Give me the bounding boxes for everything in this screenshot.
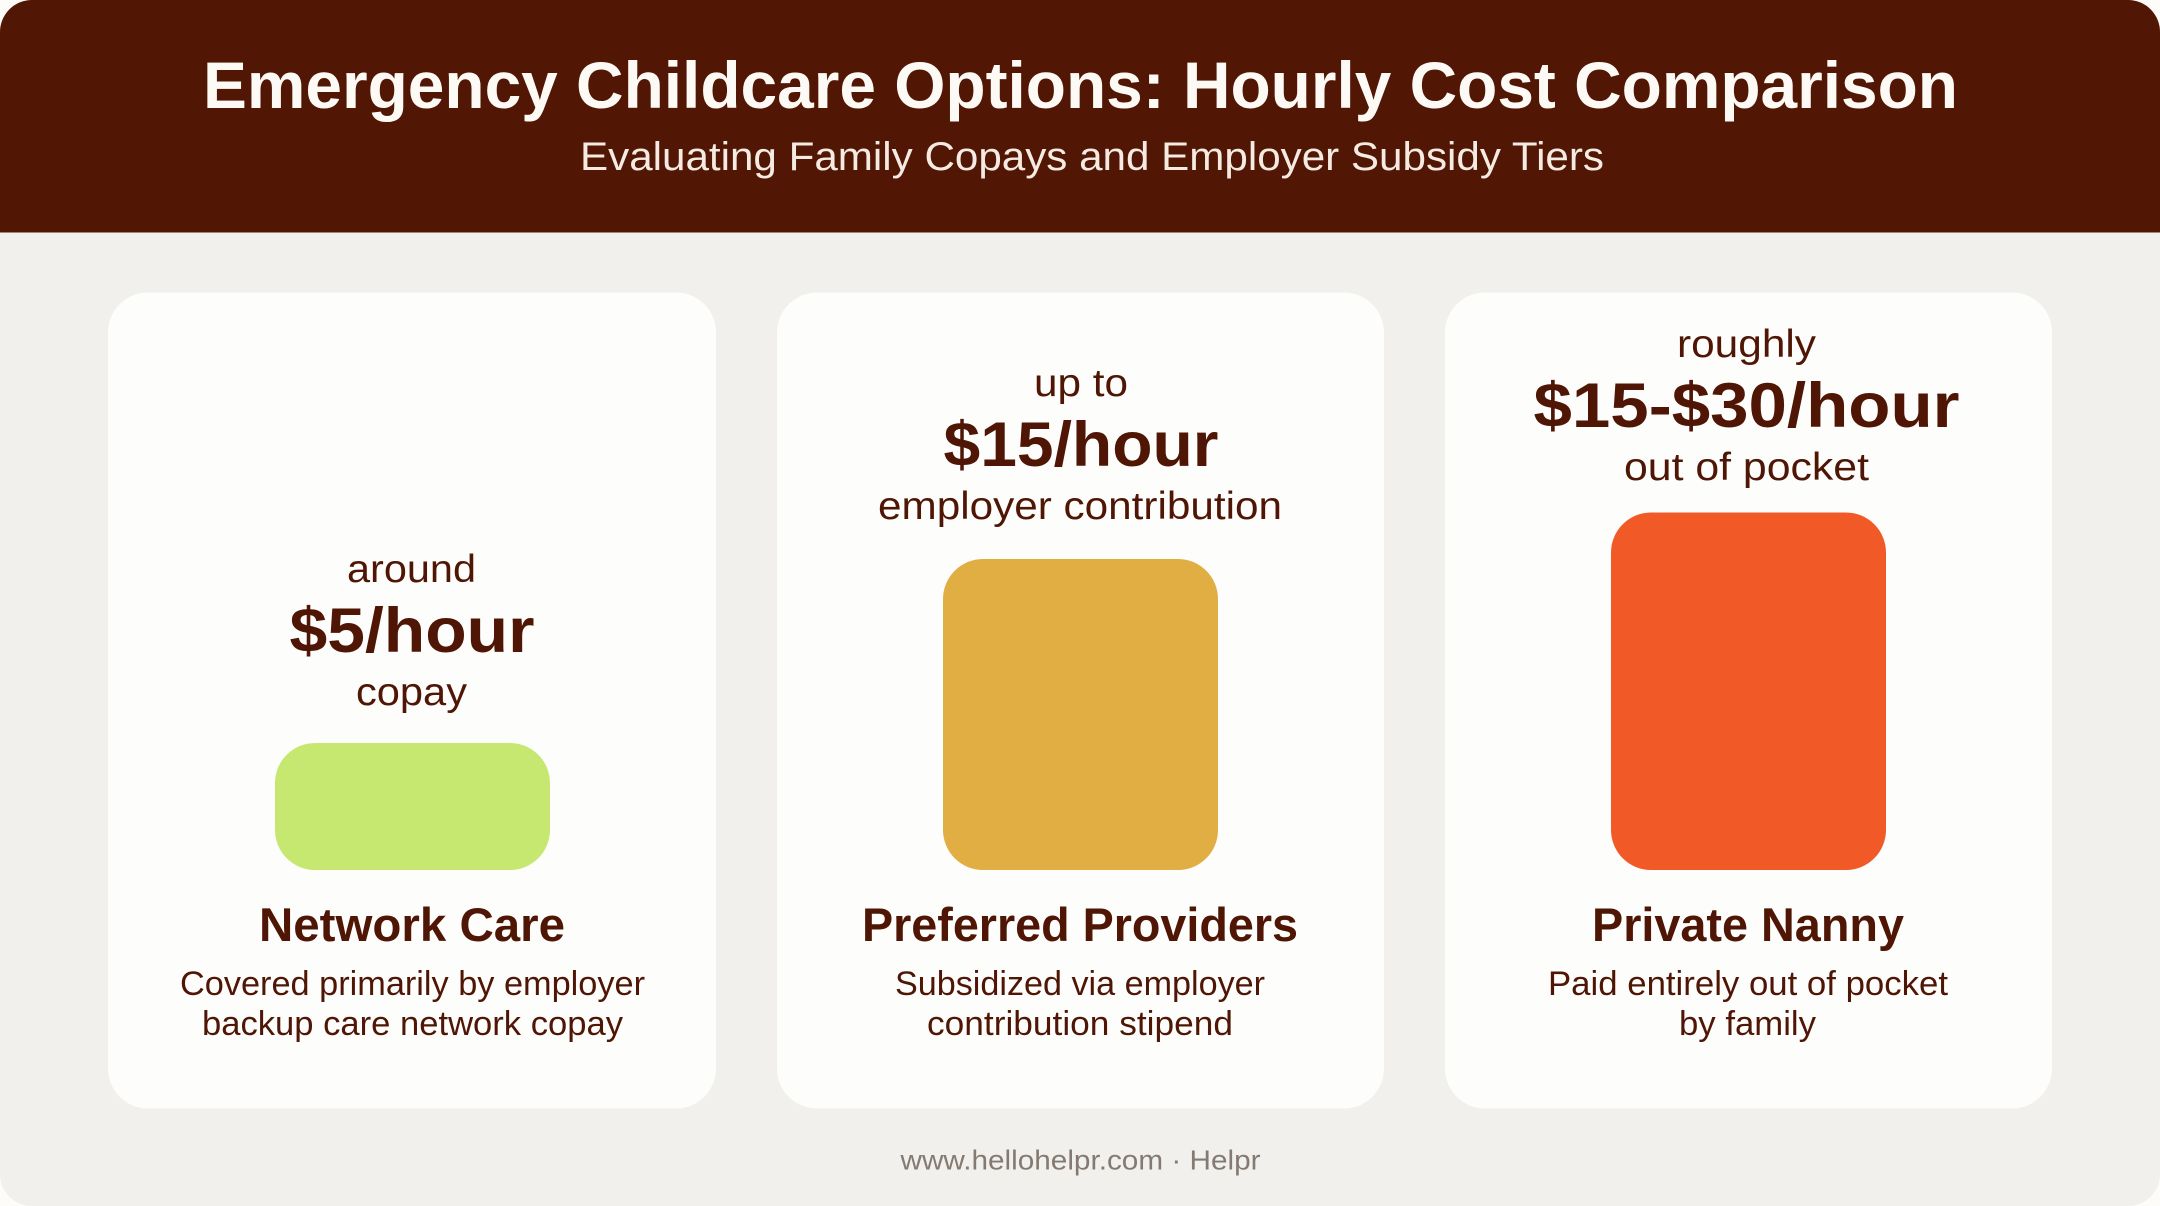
card heading: Preferred Providers: Preferred Providers xyxy=(862,898,1298,951)
title: Emergency Childcare Options: Hourly Cost Comparison xyxy=(203,48,1958,122)
bar: orange xyxy=(1611,512,1886,870)
cost label: up to $15/hour employer contribution xyxy=(878,362,1282,528)
cost label: roughly $15-$30/hour out of pocket xyxy=(1534,323,1960,489)
subtitle: Evaluating Family Copays and Employer Subsidy Tiers xyxy=(580,135,1604,179)
footer: www.hellohelpr.com · Helpr xyxy=(899,1144,1260,1176)
card description: Covered primarily by employer xyxy=(180,965,645,1003)
panel: Preferred Providers xyxy=(777,292,1384,1108)
cost label: roughly $15-$30/hour out of pocket: out of pocket xyxy=(1624,446,1869,489)
card description: Subsidized via employer xyxy=(895,965,1265,1003)
card description: by family xyxy=(1679,1005,1816,1043)
cost label: around $5/hour copay: copay xyxy=(356,671,468,714)
bar: gold xyxy=(943,559,1218,870)
card heading: Private Nanny: Private Nanny xyxy=(1592,898,1904,951)
bar: green xyxy=(275,743,550,870)
card description xyxy=(1548,965,1949,1043)
cost label: roughly $15-$30/hour out of pocket: roughly xyxy=(1677,323,1817,366)
card heading: Network Care: Network Care xyxy=(259,898,565,951)
card description: contribution stipend xyxy=(927,1005,1233,1043)
cost label: up to $15/hour employer contribution: $15/hour xyxy=(944,410,1218,480)
cost label: up to $15/hour employer contribution: up to xyxy=(1034,362,1128,405)
card description: backup care network copay xyxy=(202,1005,623,1043)
cost label: around $5/hour copay: $5/hour xyxy=(290,596,534,666)
card description xyxy=(180,965,645,1043)
cost label: around $5/hour copay xyxy=(290,548,534,714)
panel: Network Care xyxy=(108,292,716,1108)
header band xyxy=(0,0,2160,232)
cost label: up to $15/hour employer contribution: employer contribution xyxy=(878,485,1282,528)
panel: Private Nanny xyxy=(1445,292,2052,1108)
cost label: roughly $15-$30/hour out of pocket: $15-$30/hour xyxy=(1534,371,1960,441)
card description: Paid entirely out of pocket xyxy=(1548,965,1949,1003)
card description xyxy=(895,965,1265,1043)
cost label: around $5/hour copay: around xyxy=(347,548,476,591)
